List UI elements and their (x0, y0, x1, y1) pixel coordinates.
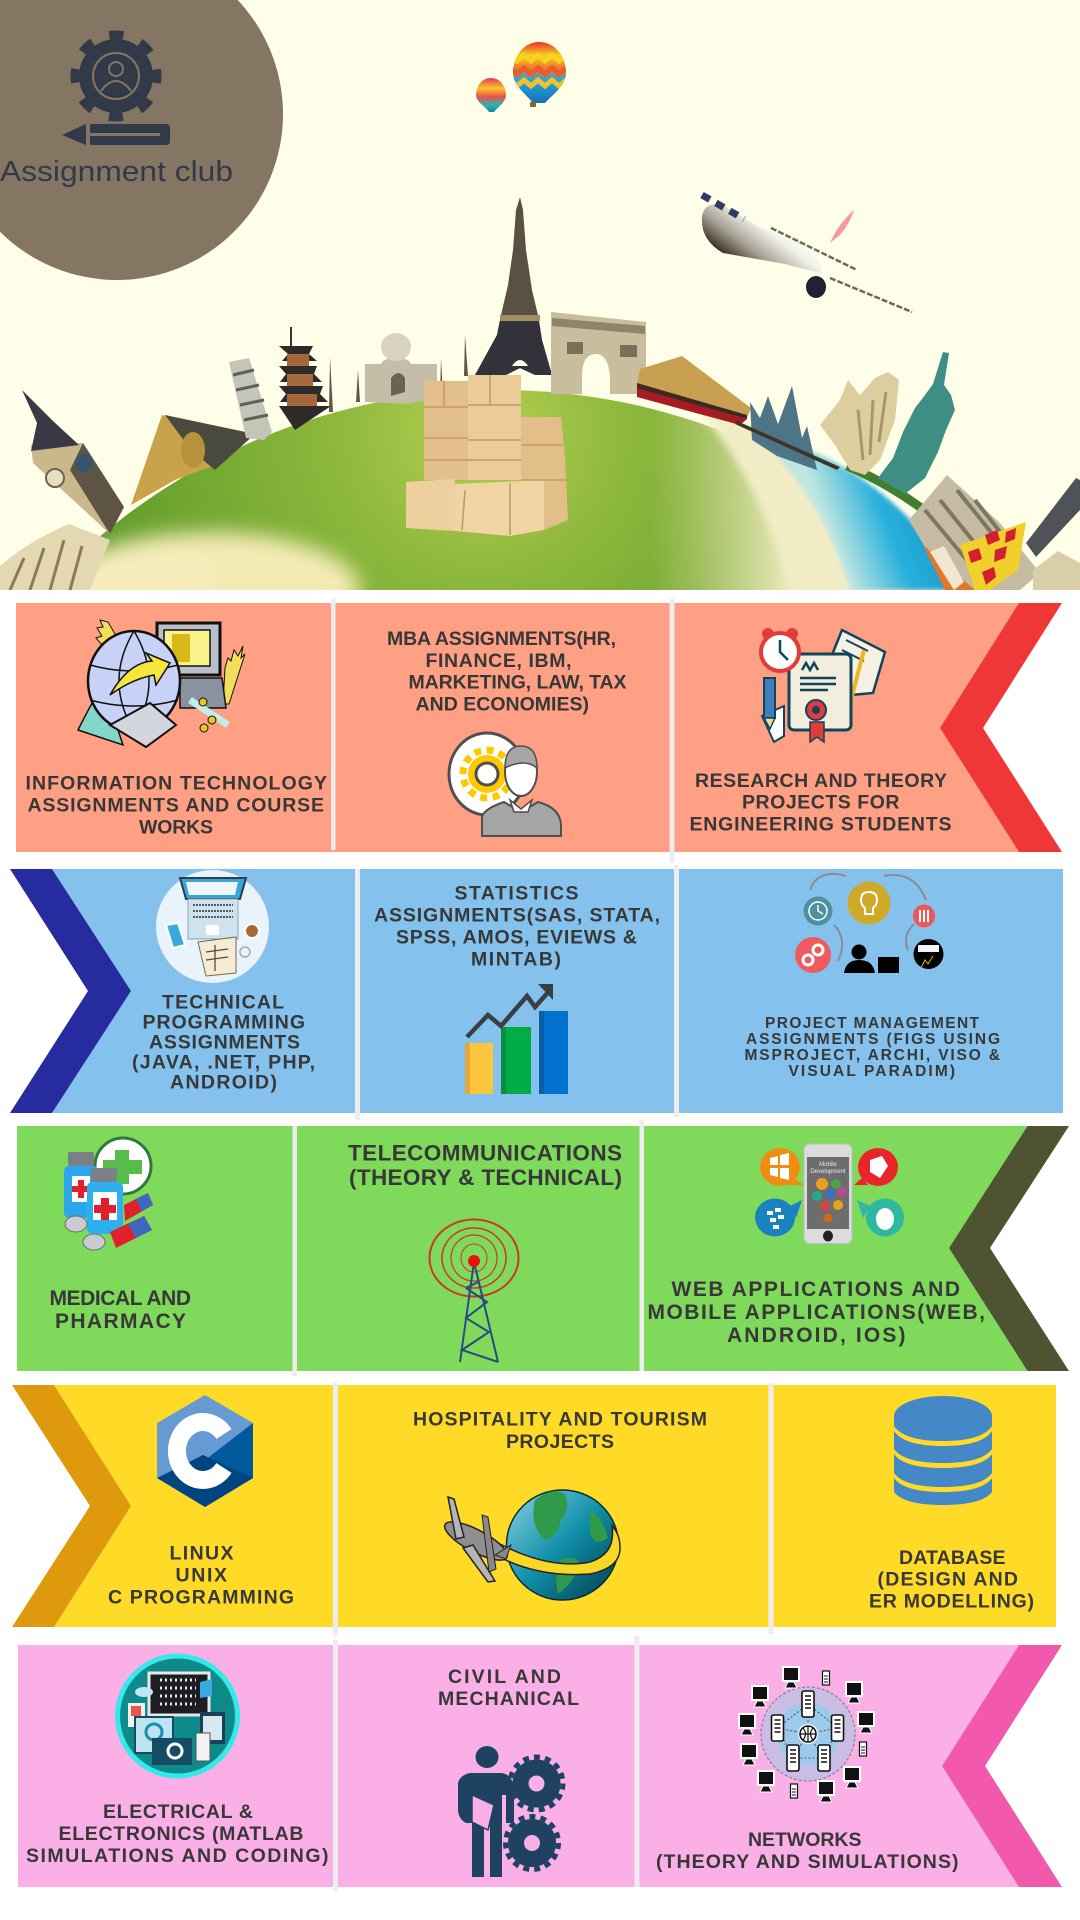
text: MBA assignments: AND ECONOMIES) (416, 694, 589, 716)
landmark: Eiffel Tower (475, 197, 552, 375)
row 1 panel (16, 599, 1062, 863)
row 3 panel (17, 1120, 1069, 1376)
text: telecommunications: TELECOMMUNICATIONS (348, 1140, 622, 1166)
text: web applications: WEB APPLICATIONS AND (672, 1278, 960, 1301)
chevron: red (940, 603, 1062, 852)
landmark: opera house (735, 386, 840, 470)
text: hospitality and tourism (413, 1408, 707, 1453)
text: electrical and electronics: ELECTRONICS (MATLAB (58, 1823, 304, 1845)
logo circle (0, 0, 283, 280)
icon: radio tower (430, 1220, 518, 1362)
text: medical and pharmacy: PHARMACY (55, 1310, 186, 1333)
icon: laptop on circle (156, 870, 269, 983)
text: networks: (THEORY AND SIMULATIONS) (656, 1851, 958, 1873)
text: hospitality and tourism: HOSPITALITY AND TOURISM (413, 1408, 707, 1430)
text: technical programming: PROGRAMMING (142, 1012, 305, 1034)
text: statistics assignments: MINTAB) (471, 948, 561, 970)
text: MBA assignments: MARKETING, LAW, TAX (408, 672, 626, 694)
text: project management: PROJECT MANAGEMENT (765, 1015, 980, 1032)
icon: pencil (62, 124, 170, 145)
landmark: pagoda (279, 327, 331, 430)
text: civil and mechanical (438, 1666, 579, 1710)
text: database (869, 1547, 1034, 1612)
text: MBA assignments: FINANCE, IBM, (426, 650, 572, 672)
logo wordmark: Assignment club (0, 156, 233, 188)
icon: database cylinder (894, 1396, 992, 1505)
airplane (702, 195, 912, 312)
text: civil and mechanical: CIVIL AND (448, 1666, 561, 1688)
icon: mobile applications (755, 1144, 904, 1244)
chevron: navy (10, 869, 131, 1113)
text: research and theory: PROJECTS FOR (742, 792, 900, 814)
text: database: ER MODELLING) (869, 1590, 1034, 1612)
text: information technology: ASSIGNMENTS AND COURSE (28, 794, 324, 816)
landmark: Statue of Liberty (878, 352, 955, 494)
globe with grass (98, 390, 945, 590)
chevron: olive (949, 1126, 1069, 1371)
text: medical and pharmacy: MEDICAL AND (50, 1287, 191, 1310)
text: linux unix c programming: UNIX (176, 1564, 227, 1586)
text: web applications: MOBILE APPLICATIONS(WEB, (648, 1301, 985, 1324)
icon: mobile applications: Development (810, 1169, 846, 1175)
row 5 panel (18, 1636, 1062, 1891)
text: information technology (26, 772, 327, 838)
text: linux unix c programming: LINUX (170, 1542, 234, 1564)
row 2 panel (10, 865, 1063, 1120)
text: electrical and electronics: SIMULATIONS AND CODING) (26, 1845, 328, 1867)
text: linux unix c programming (108, 1542, 294, 1608)
header scene (0, 0, 1080, 590)
text: telecommunications (348, 1140, 622, 1190)
icon: globe and computer (78, 620, 245, 747)
icon: gear with person (75, 35, 157, 117)
landmark: Parthenon (909, 475, 1080, 590)
icon: mobile applications: Mobile (819, 1162, 837, 1168)
icon: certificate and clock (761, 628, 885, 742)
landmark: pyramid and sphinx (131, 415, 255, 505)
text: database: (DESIGN AND (878, 1568, 1018, 1590)
row 4 panel (12, 1383, 1056, 1635)
text: database: DATABASE (899, 1547, 1006, 1569)
text: statistics assignments: STATISTICS (454, 882, 578, 904)
icon: project management cycle (795, 874, 944, 973)
text: project management: VISUAL PARADIM) (788, 1063, 955, 1080)
landmark: leaning tower (229, 358, 272, 440)
text: information technology: WORKS (139, 816, 213, 838)
icon: plane around globe (440, 1490, 620, 1600)
icon: electronics devices circle (118, 1656, 238, 1776)
landmark: cathedral (820, 372, 899, 475)
text: statistics assignments: ASSIGNMENTS(SAS, STATA, (374, 904, 660, 926)
text: telecommunications: (THEORY & TECHNICAL) (349, 1165, 622, 1190)
text: electrical and electronics (26, 1801, 328, 1867)
text: networks (656, 1829, 958, 1873)
text: technical programming: ANDROID) (170, 1072, 277, 1094)
icon: C language hexagon (157, 1395, 253, 1507)
landmark: Arc de Triomphe (551, 312, 646, 394)
text: linux unix c programming: C PROGRAMMING (108, 1586, 294, 1608)
icon: manager with gear (449, 733, 561, 836)
text: project management (744, 1015, 1000, 1080)
text: technical programming: TECHNICAL (162, 992, 284, 1014)
text: web applications (648, 1278, 985, 1347)
text: technical programming: ASSIGNMENTS (149, 1032, 300, 1054)
parcel boxes (406, 375, 568, 536)
boat with flags (923, 522, 1026, 590)
icon: engineer with gears (458, 1746, 563, 1877)
text: research and theory: ENGINEERING STUDENTS (690, 814, 952, 836)
text: networks: NETWORKS (748, 1829, 862, 1851)
balloons (476, 42, 566, 112)
cloud foreground (90, 518, 373, 590)
chevron: pink (942, 1645, 1062, 1887)
text: technical programming: (JAVA, .NET, PHP, (132, 1052, 315, 1074)
text: technical programming (132, 992, 315, 1094)
text: project management: ASSIGNMENTS (FIGS USING (746, 1031, 1000, 1048)
text: medical and pharmacy (50, 1287, 191, 1333)
text: research and theory (690, 770, 952, 836)
chevron: amber (12, 1385, 131, 1627)
text: MBA assignments: MBA ASSIGNMENTS(HR, (387, 628, 616, 650)
text: civil and mechanical: MECHANICAL (438, 1688, 579, 1710)
text: web applications: ANDROID, IOS) (727, 1324, 906, 1347)
bar chart icon (465, 984, 568, 1094)
landmark: Big Ben (0, 390, 124, 590)
text: MBA assignments (387, 628, 626, 716)
landmark: Forbidden City palace (637, 356, 751, 425)
text: hospitality and tourism: PROJECTS (506, 1431, 614, 1453)
landmark: obelisk (1026, 478, 1080, 557)
text: statistics assignments (374, 882, 660, 970)
icon: medical bottles (64, 1138, 153, 1250)
text: statistics assignments: SPSS, AMOS, EVIEWS & (396, 926, 637, 948)
landmark: Taj Mahal (329, 333, 468, 412)
text: project management: MSPROJECT, ARCHI, VISO & (744, 1047, 1000, 1064)
text: electrical and electronics: ELECTRICAL & (103, 1801, 253, 1823)
icon: network diagram (739, 1667, 874, 1802)
text: information technology: INFORMATION TECHNOLOGY (26, 772, 327, 794)
text: research and theory: RESEARCH AND THEORY (695, 770, 947, 792)
